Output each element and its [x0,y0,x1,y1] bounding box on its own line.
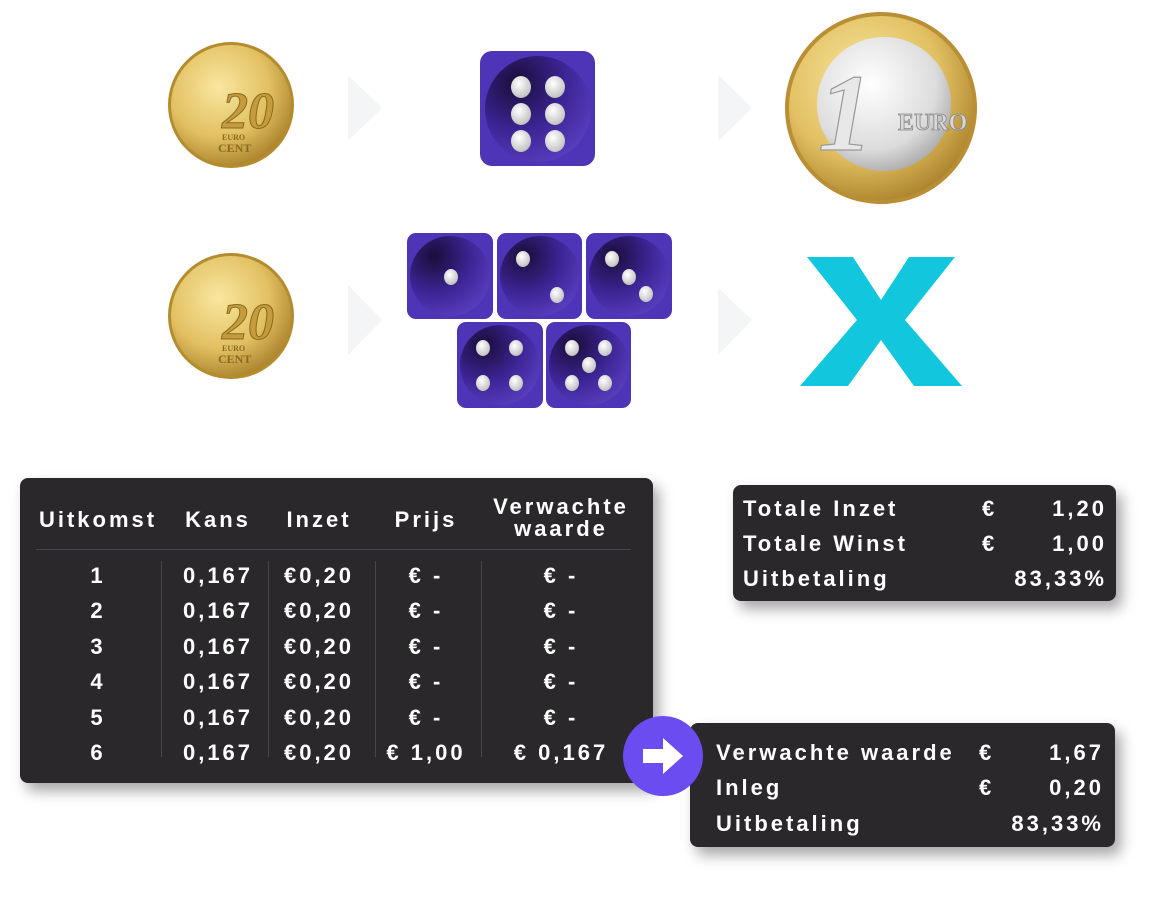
icon: die six [480,51,595,166]
panel: expected value summary [690,723,1115,847]
arrow: chevron 3 [348,285,382,355]
icon: 20 cent coin bottom: 20 [221,294,274,351]
panel: expected value summary: € [979,775,994,800]
panel: outcome table: €0,20 [284,598,354,623]
panel: outcome table: Kans [185,507,251,532]
panel: totals summary: 83,33% [1014,566,1107,591]
icon: 20 cent coin top: EURO [222,133,245,142]
panel: outcome table: € - [409,669,443,694]
icon: 20 cent coin top: CENT [218,141,251,155]
panel: outcome table: € - [544,563,578,588]
panel: outcome table: 0,167 [183,669,253,694]
table rows [90,563,608,765]
panel: expected value summary: 1,67 [1049,740,1104,765]
panel: outcome table: 0,167 [183,705,253,730]
panel: outcome table: € - [409,563,443,588]
panel: outcome table: € - [544,634,578,659]
panel: outcome table: € 1,00 [386,740,466,765]
panel: outcome table: 1 [90,563,106,588]
panel: outcome table: €0,20 [284,634,354,659]
panel: outcome table: 5 [90,705,106,730]
panel: expected value summary: Inleg [716,775,782,800]
panel: outcome table: 0,167 [183,563,253,588]
panel: outcome table: 6 [90,740,106,765]
icon: 20 cent coin bottom: EURO [222,344,245,353]
panel: expected value summary: Verwachte waarde [716,740,955,765]
icon: 20 cent coin bottom [168,253,294,379]
arrow: chevron 4 [718,288,752,355]
panel: outcome table: 0,167 [183,634,253,659]
icon: 20 cent coin top [168,42,294,168]
panel: outcome table: €0,20 [284,563,354,588]
panel: expected value summary: 0,20 [1049,775,1104,800]
panel: outcome table: €0,20 [284,705,354,730]
panel: totals summary: € [982,496,997,521]
panel: totals summary: € [982,531,997,556]
panel: outcome table: 2 [90,598,106,623]
panel: outcome table: 4 [90,669,106,694]
icon: cyan X [800,257,962,386]
panel: expected value summary: Uitbetaling [716,811,863,836]
table header [39,494,629,541]
panel: totals summary: 1,00 [1052,531,1107,556]
arrow: chevron 1 [348,75,382,141]
panel: outcome table: €0,20 [284,740,354,765]
panel: outcome table: Uitkomst [39,507,157,532]
panel: outcome table: € - [409,705,443,730]
panel: outcome table: 3 [90,634,106,659]
panel: totals summary [733,485,1116,601]
icon: 20 cent coin bottom: CENT [218,352,251,366]
arrow: chevron 2 [718,75,752,141]
panel: expected value summary: 83,33% [1011,811,1104,836]
icon: dice one to five [407,233,672,408]
panel: outcome table: € - [544,669,578,694]
icon: 1 euro coin: 1 [818,52,873,174]
top illustration [168,12,977,408]
icon: 20 cent coin top: 20 [221,83,274,140]
panel: outcome table: Prijs [395,507,457,532]
panel: totals summary: 1,20 [1052,496,1107,521]
panel: outcome table: € 0,167 [514,740,608,765]
panel: outcome table: Verwachte [493,494,629,519]
panel: outcome table: € - [544,598,578,623]
panel: outcome table: €0,20 [284,669,354,694]
panel: totals summary: Uitbetaling [743,566,890,591]
panel: outcome table: 0,167 [183,598,253,623]
panel: totals summary: Totale Inzet [743,496,898,521]
panel: expected value summary: € [979,740,994,765]
panel: outcome table: € - [409,598,443,623]
panel: outcome table: waarde [514,516,608,541]
panel: outcome table: € - [544,705,578,730]
icon: 1 euro coin [785,12,977,204]
panel: totals summary: Totale Winst [743,531,908,556]
icon: purple arrow circle [623,716,703,796]
panel: outcome table [20,478,653,783]
panel: outcome table: € - [409,634,443,659]
panel: outcome table: Inzet [286,507,352,532]
icon: 1 euro coin: EURO [898,110,967,136]
panel: outcome table: 0,167 [183,740,253,765]
